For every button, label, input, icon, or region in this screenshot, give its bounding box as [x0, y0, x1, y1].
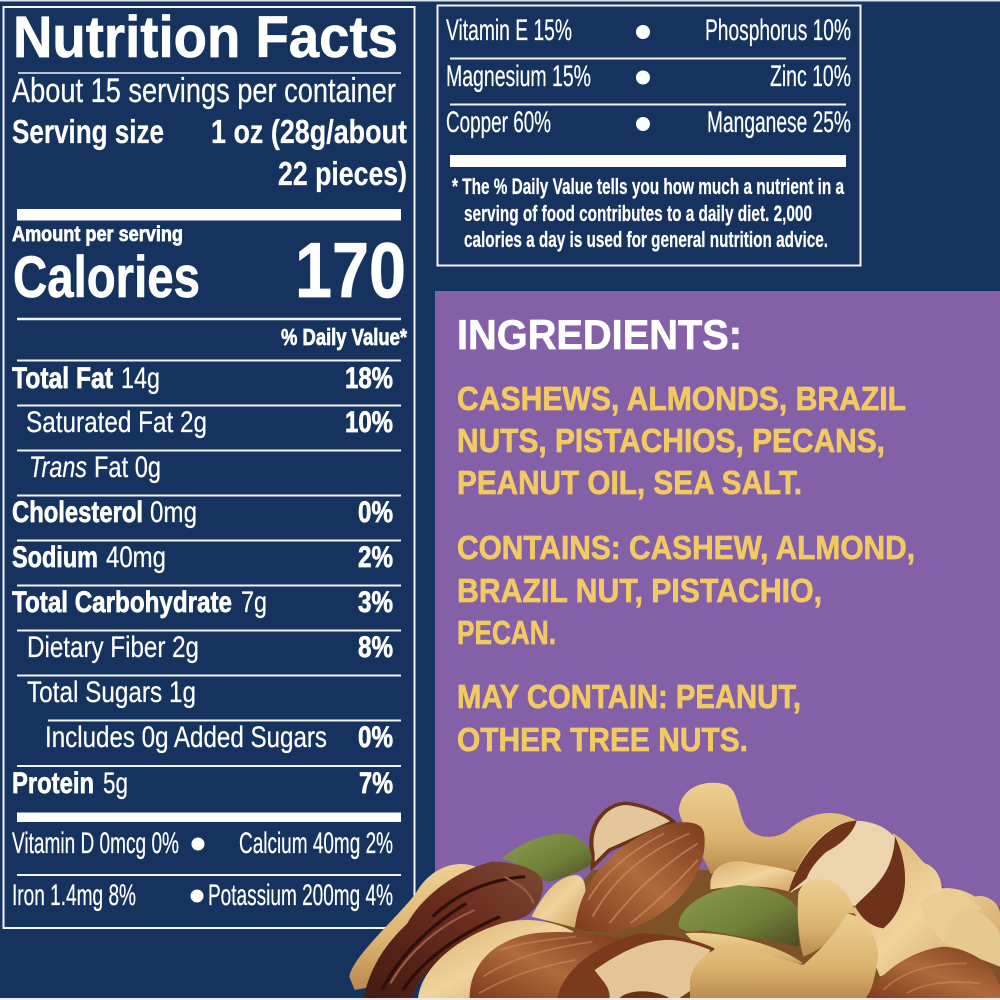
- row: added sugars: Includes 0g Added Sugars: [45, 721, 327, 754]
- row: iron and potassium: Iron 1.4mg 8%: [12, 879, 136, 912]
- row: trans fat: Fat 0g: [94, 451, 161, 484]
- footnote: [452, 174, 845, 252]
- row: protein: Protein: [12, 767, 94, 800]
- row: copper and manganese: Copper 60%: [446, 106, 551, 139]
- bottom-right almond: [865, 947, 1000, 1000]
- right cluster of nuts: [690, 821, 1000, 1000]
- bottom Brazil nut: [557, 933, 715, 1000]
- row: sodium: 40mg: [106, 541, 166, 574]
- contains statement: CONTAINS: CASHEW, ALMOND,: [457, 529, 915, 566]
- row: vitamin E and phosphorus: Vitamin E 15%: [446, 14, 572, 47]
- row: dietary fiber: 8%: [358, 631, 393, 664]
- back Brazil nut: [591, 803, 673, 867]
- row: protein: 5g: [103, 767, 128, 800]
- servings per container: About 15 servings per container: [12, 72, 396, 110]
- row: vitamin E and phosphorus: Phosphorus 10%: [705, 14, 851, 47]
- ingredients list: CASHEWS, ALMONDS, BRAZIL: [457, 380, 906, 417]
- row: sodium: [12, 541, 393, 574]
- row: total fat: [12, 362, 393, 395]
- serving size: Serving size: [12, 113, 164, 150]
- ingredients heading: INGREDIENTS:: [457, 311, 742, 358]
- row: copper and manganese: [446, 106, 851, 139]
- back cashew: [679, 783, 856, 873]
- row: protein: 7%: [359, 767, 393, 800]
- footnote: calories a day is used for general nutrition advice.: [464, 227, 828, 252]
- lower-right cashew lobe: [945, 908, 1000, 967]
- back pistachio: [502, 834, 592, 882]
- pecan: [363, 862, 543, 1000]
- bottom almond: [470, 932, 620, 1000]
- row: total carbohydrate: 7g: [241, 586, 267, 619]
- serving size: 1 oz (28g/about: [211, 113, 407, 150]
- row: vitamin D and calcium: [12, 827, 393, 860]
- row: cholesterol: [12, 496, 393, 529]
- row: cholesterol: 0mg: [150, 496, 197, 529]
- front cashew: [690, 913, 878, 1000]
- row: cholesterol: Cholesterol: [12, 496, 143, 529]
- contains statement: BRAZIL NUT, PISTACHIO,: [457, 572, 822, 609]
- row: dietary fiber: Dietary Fiber 2g: [27, 631, 199, 664]
- row: sodium: 2%: [358, 541, 393, 574]
- panel: vitamins and footnote: [438, 6, 860, 266]
- contains statement: [457, 529, 915, 651]
- may contain statement: MAY CONTAIN: PEANUT,: [457, 678, 801, 715]
- serving size: [12, 113, 407, 192]
- footnote: * The % Daily Value tells you how much a nutrient in a: [452, 174, 845, 199]
- ingredients list: [457, 380, 906, 501]
- row: saturated fat: Saturated Fat 2g: [26, 406, 207, 439]
- row: magnesium and zinc: [446, 60, 851, 93]
- footnote: serving of food contributes to a daily diet. 2,000: [464, 201, 812, 226]
- may contain statement: OTHER TREE NUTS.: [457, 721, 748, 758]
- row: total fat: 14g: [121, 362, 160, 395]
- shadow base: [466, 870, 1000, 1000]
- contains statement: PECAN.: [457, 614, 556, 651]
- calories value: 170: [295, 226, 406, 314]
- row: trans fat: [29, 451, 161, 484]
- title: Nutrition Facts: [13, 5, 398, 70]
- row: added sugars: 0%: [358, 721, 393, 754]
- cluster lobe: [937, 900, 982, 943]
- center-bottom cashew piece: [685, 932, 803, 964]
- row: iron and potassium: Potassium 200mg 4%: [208, 879, 393, 912]
- row: sodium: Sodium: [12, 541, 98, 574]
- row: magnesium and zinc: Magnesium 15%: [446, 60, 591, 93]
- serving size: 22 pieces): [278, 155, 407, 192]
- row: saturated fat: [26, 406, 393, 439]
- panel: ingredients: [435, 291, 1000, 1000]
- cashew behind Brazil nut: [853, 833, 1000, 977]
- row: dietary fiber: [27, 631, 393, 664]
- row: vitamin D and calcium: Calcium 40mg 2%: [239, 827, 393, 860]
- row: protein: [12, 767, 393, 800]
- row: total carbohydrate: Total Carbohydrate: [12, 586, 232, 619]
- top edge band: [0, 0, 1000, 2]
- bottom cashew: [418, 920, 574, 1000]
- daily value header: % Daily Value*: [281, 324, 407, 350]
- row: vitamin D and calcium: Vitamin D 0mcg 0%: [12, 827, 179, 860]
- row: cholesterol: 0%: [358, 496, 393, 529]
- ingredients list: PEANUT OIL, SEA SALT.: [457, 464, 802, 501]
- bottom edge band: [0, 998, 1000, 1000]
- middle small cashew: [532, 875, 585, 928]
- row: trans fat: Trans: [29, 451, 87, 484]
- large almond: [575, 822, 705, 932]
- large Brazil nut: [788, 821, 905, 928]
- ingredients list: NUTS, PISTACHIOS, PECANS,: [457, 422, 885, 459]
- row: total fat: Total Fat: [12, 362, 113, 395]
- calories label: Calories: [13, 245, 200, 310]
- amount per serving: Amount per serving: [12, 223, 183, 246]
- center pistachio: [679, 885, 799, 947]
- row: total fat: 18%: [345, 362, 393, 395]
- middle cashew: [710, 861, 799, 893]
- may contain statement: [457, 678, 801, 758]
- row: total carbohydrate: 3%: [358, 586, 393, 619]
- panel: nutrition facts: [4, 5, 414, 928]
- left cashew: [349, 864, 476, 990]
- row: iron and potassium: [12, 879, 393, 912]
- row: copper and manganese: Manganese 25%: [707, 106, 851, 139]
- illustration: pile of mixed nuts: [349, 783, 1000, 1000]
- row: vitamin E and phosphorus: [446, 14, 851, 47]
- vertical cashew: [798, 879, 857, 957]
- row: saturated fat: 10%: [345, 406, 393, 439]
- row: total sugars: Total Sugars 1g: [27, 676, 196, 709]
- left and center nuts: [349, 783, 1000, 1000]
- row: magnesium and zinc: Zinc 10%: [770, 60, 851, 93]
